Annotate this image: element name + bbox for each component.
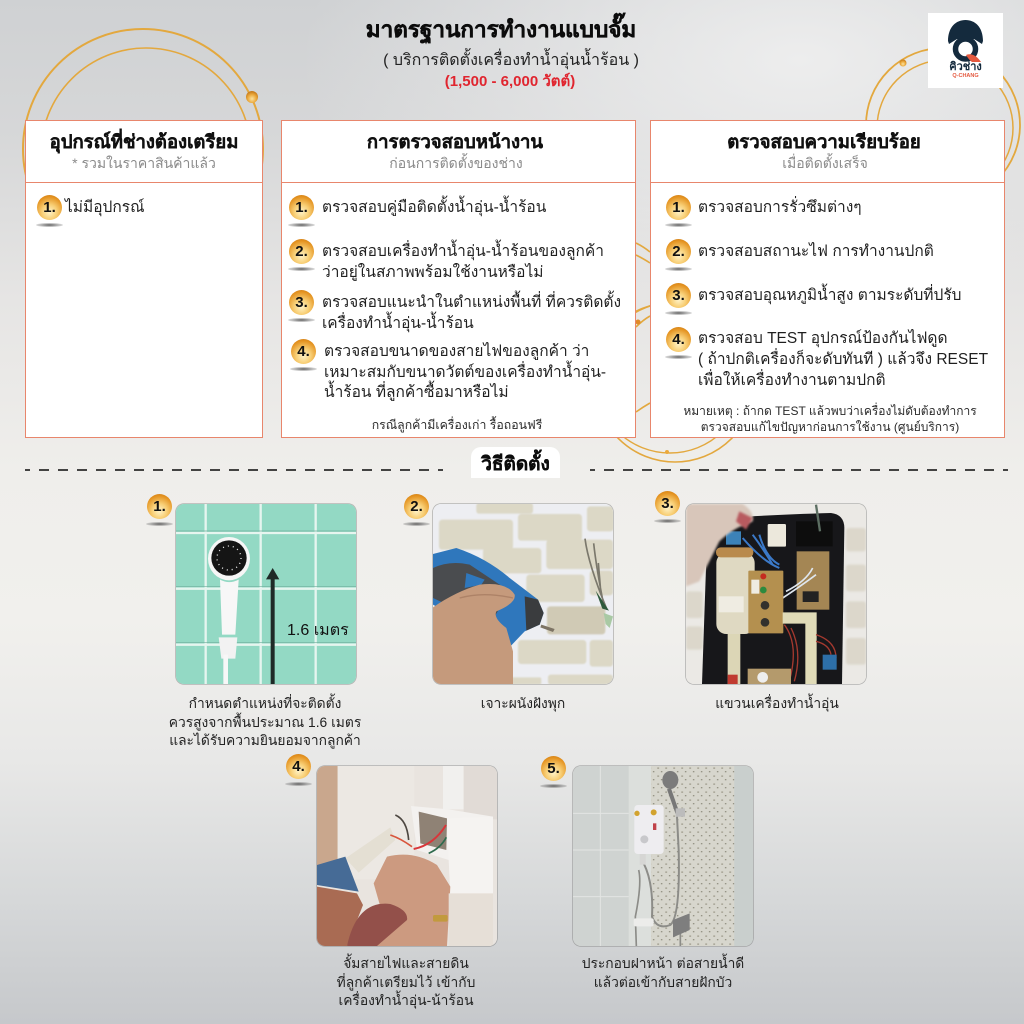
step 5 badge: 5.	[547, 760, 560, 777]
item 3 text: ตรวจสอบแนะนำในตำแหน่งพื้นที่ ที่ควรติดตั้ง	[322, 294, 621, 311]
section heading: installation: วิธีติดตั้ง	[481, 454, 550, 475]
item 4 text: ( ถ้าปกติเครื่องก็จะดับทันที ) แล้วจึง RESET	[698, 351, 988, 368]
panel subheading: ก่อนการติดตั้งของช่าง	[389, 155, 523, 171]
logo: Q-Chang	[928, 13, 1003, 88]
panel heading: อุปกรณ์ที่ช่างต้องเตรียม	[50, 131, 238, 152]
item 1 badge	[288, 195, 315, 227]
item 4 badge	[290, 339, 317, 371]
step 1 caption: ควรสูงจากพื้นประมาณ 1.6 เมตร	[169, 715, 361, 730]
step 2 caption: เจาะผนังฝังพุก	[481, 696, 565, 711]
remark note: ตรวจสอบแก้ไขปัญหาก่อนการใช้งาน (ศูนย์บริการ)	[701, 420, 959, 434]
item 3 badge	[288, 290, 315, 322]
logo: Q-Chang: คิวช่าง	[949, 61, 982, 73]
panel subheading: เมื่อติดตั้งเสร็จ	[782, 155, 868, 171]
item 1 badge: 1.	[43, 199, 56, 216]
step 1 caption: และได้รับความยินยอมจากลูกค้า	[169, 733, 361, 748]
step 1 caption	[169, 694, 361, 749]
remark note: หมายเหตุ : ถ้ากด TEST แล้วพบว่าเครื่องไม่ดับต้องทำการ	[683, 404, 977, 418]
item 3 badge: 3.	[672, 287, 685, 304]
item 1 text: ไม่มีอุปกรณ์	[65, 199, 144, 216]
step 2 badge: 2.	[410, 498, 423, 515]
item 2 badge: 2.	[295, 243, 308, 260]
item 4 badge: 4.	[297, 343, 310, 360]
step 1 photo: shower height	[176, 504, 356, 684]
item 4 text: เพื่อให้เครื่องทำงานตามปกติ	[698, 372, 886, 389]
item 1 badge	[36, 195, 63, 227]
item 3 badge	[665, 283, 692, 315]
item 4 badge: 4.	[672, 331, 685, 348]
item 3 text: ตรวจสอบอุณหภูมิน้ำสูง ตามระดับที่ปรับ	[698, 287, 962, 304]
item 1 badge: 1.	[295, 199, 308, 216]
step 4 caption: ที่ลูกค้าเตรียมไว้ เข้ากับ	[337, 975, 475, 990]
step 1 badge: 1.	[153, 498, 166, 515]
step 3 badge: 3.	[661, 495, 674, 512]
item 4 text: ตรวจสอบ TEST อุปกรณ์ป้องกันไฟดูด	[698, 330, 948, 347]
item 2 badge: 2.	[672, 243, 685, 260]
item 2 text: ตรวจสอบสถานะไฟ การทำงานปกติ	[698, 243, 934, 260]
step 4 photo: connecting wires	[317, 766, 497, 946]
item 2 text: ตรวจสอบเครื่องทำน้ำอุ่น-น้ำร้อนของลูกค้า	[322, 243, 604, 260]
panel: site inspection	[281, 120, 636, 438]
section heading: installation	[471, 447, 560, 478]
panel: final check	[650, 120, 1005, 438]
wattage range: (1,500 - 6,000 วัตต์)	[445, 73, 575, 90]
panel: tools to prepare	[25, 120, 263, 438]
step 1 caption: กำหนดตำแหน่งที่จะติดตั้ง	[189, 696, 341, 711]
step 4 caption	[337, 954, 475, 1009]
step 4 caption: เครื่องทำน้ำอุ่น-น้าร้อน	[338, 993, 474, 1008]
step 5 caption: ประกอบฝาหน้า ต่อสายน้ำดี	[582, 956, 744, 971]
item 4 text: เหมาะสมกับขนาดวัตต์ของเครื่องทำน้ำอุ่น-	[324, 364, 606, 380]
step 5 photo: finished heater	[573, 766, 753, 946]
item 4 text	[324, 342, 606, 401]
step 3 caption: แขวนเครื่องทำน้ำอุ่น	[715, 696, 839, 711]
item 4 text	[698, 329, 988, 389]
free removal note: กรณีลูกค้ามีเครื่องเก่า รื้อถอนฟรี	[372, 418, 542, 432]
logo: Q-Chang: Q-CHANG	[952, 73, 979, 79]
item 4 text: น้ำร้อน ที่ลูกค้าซื้อมาหรือไม่	[324, 384, 509, 401]
item 1 badge: 1.	[672, 199, 685, 216]
item 2 text	[322, 240, 604, 281]
step 4 badge	[285, 754, 312, 786]
panel subheading: * รวมในราคาสินค้าแล้ว	[72, 155, 216, 171]
item 1 text: ตรวจสอบการรั่วซึมต่างๆ	[698, 199, 862, 216]
item 3 badge: 3.	[295, 294, 308, 311]
panel heading: การตรวจสอบหน้างาน	[367, 131, 543, 152]
step 3 badge	[654, 491, 681, 523]
remark note	[683, 402, 977, 434]
item 4 text: ตรวจสอบขนาดของสายไฟของลูกค้า ว่า	[324, 343, 589, 360]
panel heading: ตรวจสอบความเรียบร้อย	[727, 131, 921, 152]
item 1 badge	[665, 195, 692, 227]
title: มาตรฐานการทำงานแบบจั๊ม	[366, 17, 636, 42]
step 3 photo: hanging the heater	[686, 504, 866, 684]
step 5 caption: แล้วต่อเข้ากับสายฝักบัว	[594, 975, 732, 990]
step 5 badge	[540, 756, 567, 788]
item 2 badge	[288, 239, 315, 271]
step 5 caption	[582, 954, 744, 990]
item 3 text: เครื่องทำน้ำอุ่น-น้ำร้อน	[322, 314, 474, 332]
decorative gold rings	[22, 28, 1021, 463]
step 4 caption: จั้มสายไฟและสายดิน	[343, 956, 469, 971]
step 1 badge	[146, 494, 173, 526]
step 2 badge	[403, 494, 430, 526]
subtitle: ( บริการติดตั้งเครื่องทำน้ำอุ่นน้ำร้อน )	[383, 52, 639, 69]
item 2 badge	[665, 239, 692, 271]
item 2 text: ว่าอยู่ในสภาพพร้อมใช้งานหรือไม่	[322, 264, 543, 280]
step 2 photo: drilling the wall	[433, 504, 613, 684]
item 1 text: ตรวจสอบคู่มือติดตั้งน้ำอุ่น-น้ำร้อน	[322, 199, 546, 216]
item 3 text	[322, 290, 621, 332]
height label: 1.6 เมตร	[287, 622, 349, 639]
item 4 badge	[665, 327, 692, 359]
step 4 badge: 4.	[292, 758, 305, 775]
